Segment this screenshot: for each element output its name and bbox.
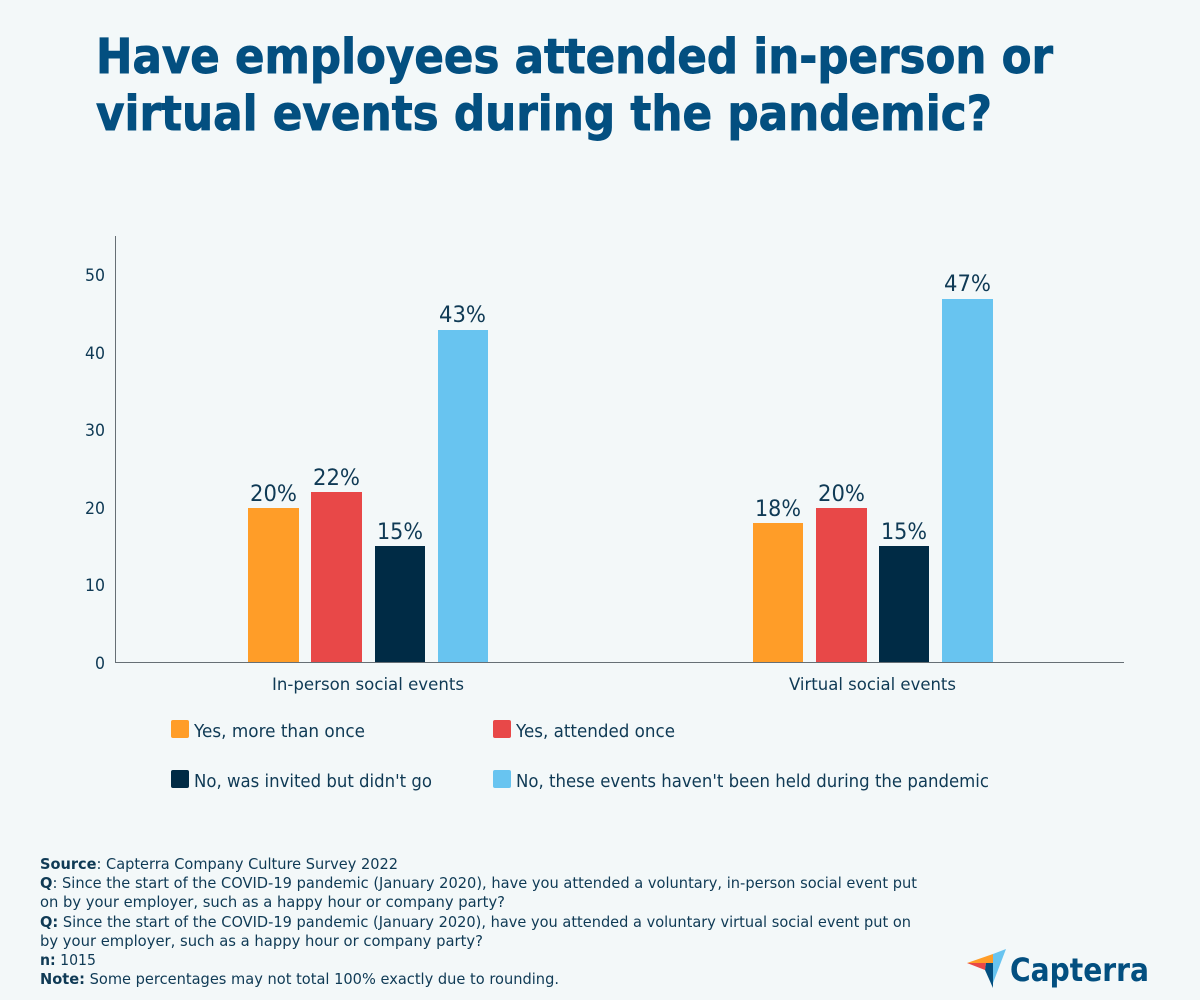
x axis: Virtual social events	[789, 675, 956, 695]
x axis	[115, 662, 1124, 695]
legend: No, these events haven't been held during the pandemic	[516, 772, 989, 792]
y axis: 30	[85, 421, 105, 441]
bars: virtual social events	[753, 272, 993, 662]
logo: Capterra	[967, 949, 1149, 989]
y axis: 50	[85, 266, 105, 286]
y axis	[85, 236, 116, 674]
source notes: Note: Some percentages may not total 100% exactly due to rounding.	[40, 970, 559, 988]
source notes: by your employer, such as a happy hour or company party?	[40, 932, 483, 950]
legend: Yes, more than once	[193, 722, 365, 742]
y axis: 20	[85, 499, 105, 519]
bars: in-person social events: 22%	[313, 466, 360, 491]
bars: in-person social events: 20%	[250, 482, 297, 507]
y axis: 0	[95, 654, 105, 674]
bars: in-person social events: 15%	[377, 520, 423, 545]
bars: in-person social events: 43%	[439, 303, 486, 328]
legend: Yes, attended once	[515, 722, 675, 742]
legend	[171, 720, 989, 792]
source notes: n: 1015	[40, 951, 96, 969]
bars: in-person social events	[248, 303, 488, 662]
bar chart	[85, 236, 1124, 695]
title: virtual events during the pandemic?	[96, 86, 992, 142]
source notes: Q: Since the start of the COVID-19 pandemic (January 2020), have you attended a voluntary, in-person social event put	[40, 874, 917, 892]
title: Have employees attended in-person or	[96, 29, 1053, 85]
bars: virtual social events: 15%	[881, 520, 927, 545]
source notes	[40, 855, 917, 988]
source notes: on by your employer, such as a happy hour or company party?	[40, 893, 505, 911]
bars: virtual social events: 20%	[818, 482, 865, 507]
source notes: Source: Capterra Company Culture Survey 2022	[40, 855, 398, 873]
icon: Capterra arrow	[967, 949, 1006, 988]
bars: virtual social events: 18%	[755, 497, 801, 522]
x axis: In-person social events	[272, 675, 464, 695]
legend: No, was invited but didn't go	[194, 772, 432, 792]
title	[96, 29, 1053, 142]
y axis: 40	[85, 344, 105, 364]
logo: Capterra: Capterra	[1010, 951, 1149, 989]
bars: virtual social events: 47%	[944, 272, 991, 297]
y axis: 10	[85, 576, 105, 596]
source notes: Q: Since the start of the COVID-19 pandemic (January 2020), have you attended a voluntary virtual social event put on	[40, 913, 911, 931]
